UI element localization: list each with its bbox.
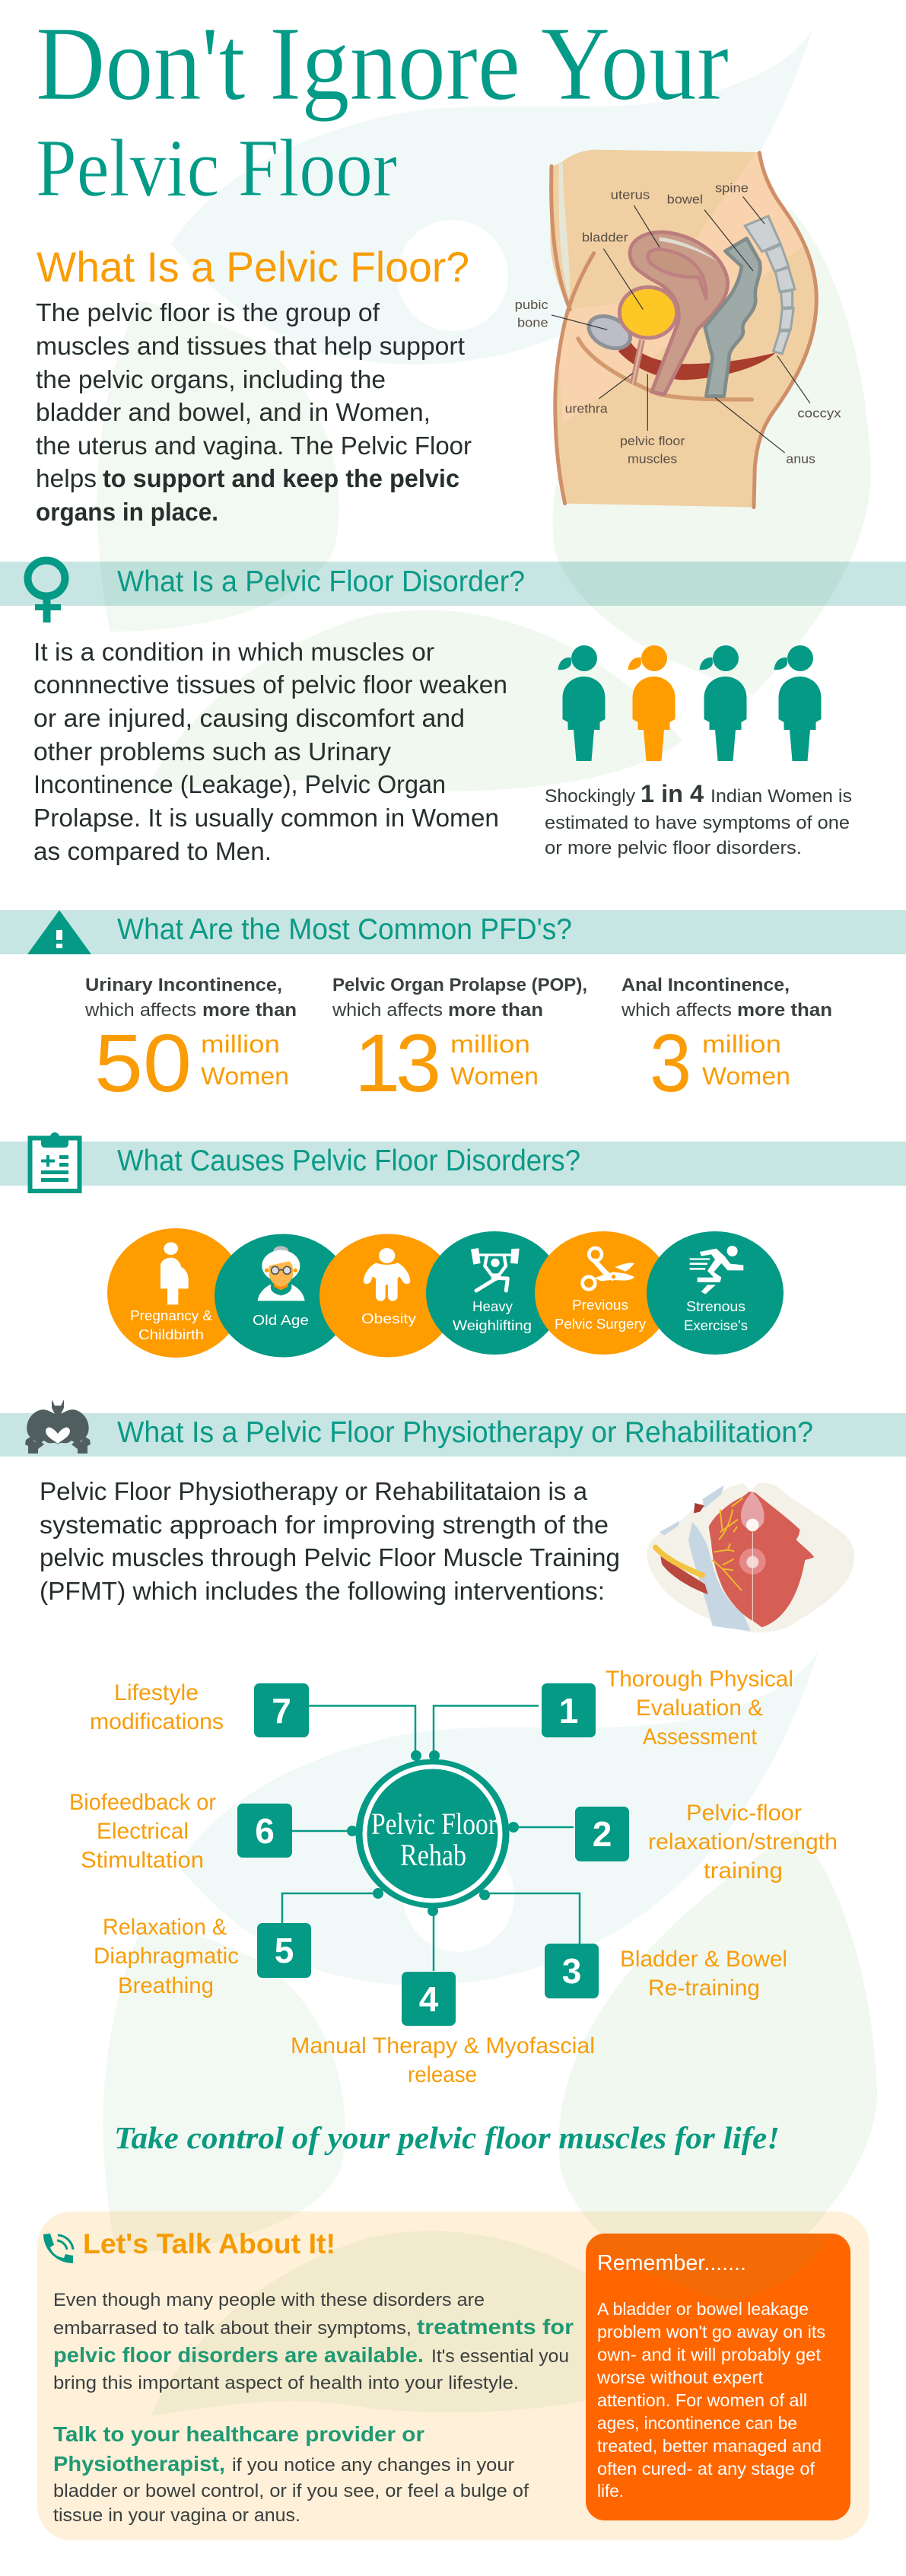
text block: to support and keep the pelvic [103,464,459,492]
stat: anal incontinence: million [702,1030,781,1058]
cause: previous pelvic surgery: Previous [572,1297,628,1313]
step 1: Evaluation & [636,1696,763,1721]
hub circle: Pelvic Floor [371,1807,497,1841]
background leaf motif: top [97,30,871,795]
text block: systematic approach for improving strength of the [40,1511,609,1539]
callout: remember: worse without expert [596,2367,764,2387]
text block [33,638,507,865]
callout: remember: Remember....... [597,2251,746,2275]
icon: weightlifter [471,1248,520,1291]
panel: what is a pelvic floor disorder [0,560,906,865]
callout: 1 in 4: Shockingly [545,786,635,807]
text block [40,1477,620,1605]
stat: anal incontinence [621,975,832,1109]
heading: What Is a Pelvic Floor Disorder? [117,565,525,598]
cause: heavy weightlifting: Weighlifting [453,1317,532,1333]
stat: anal incontinence: Women [702,1062,790,1090]
heading: What Is a Pelvic Floor Physiotherapy or Rehabilitation? [117,1416,813,1449]
panel: physiotherapy or rehabilitation [0,1399,906,1632]
cause: obesity: Obesity [361,1310,417,1326]
callout: 1 in 4: 1 in 4 [641,780,704,807]
title: Don't Ignore Your [36,5,729,123]
pelvic anatomy illustration: bowel [667,193,703,207]
step 3: Bladder & Bowel [620,1947,787,1972]
stat: urinary incontinence: which affects [84,1000,196,1021]
step 7: 7 [272,1691,291,1731]
text block: the uterus and vagina. The Pelvic Floor [36,431,472,460]
step 1 [542,1667,793,1750]
pelvic anatomy illustration: pubic [515,298,548,312]
text block: Pelvic Floor Physiotherapy or Rehabilitataion is a [40,1477,588,1505]
connector lines [282,1706,580,1971]
callout: 1 in 4: Indian Women is [710,786,852,807]
step 3 [545,1944,787,2001]
text block: talk to your provider: tissue in your vagina or anus. [53,2505,300,2526]
icon: pelvis [25,1399,91,1454]
panel: most common PFDs [0,910,906,1109]
step 3: Re-training [648,1976,760,2001]
pelvic floor model image [647,1482,854,1632]
cause: heavy weightlifting: Heavy [472,1298,513,1314]
callout: 1 in 4 [545,780,852,858]
step 4: 4 [419,1979,439,2019]
icon: female symbol [27,560,65,623]
heading: What Are the Most Common PFD's? [117,913,572,946]
step 1: Thorough Physical [606,1667,793,1692]
text block: talk to your provider: if you notice any changes in your [232,2455,514,2476]
stat: pelvic organ prolapse: Women [450,1062,539,1090]
text block: talk to your provider: Talk to your healthcare provider or [53,2422,424,2446]
stat: pelvic organ prolapse [332,975,587,1109]
panel: let's talk about it [37,2211,869,2540]
icon: pregnant woman [161,1242,189,1304]
step 5: Breathing [118,1973,214,1998]
icon: clipboard [30,1132,79,1191]
stat: anal incontinence: which affects [621,1000,732,1021]
icon: obese figure [364,1248,410,1301]
cause: old age [215,1234,351,1358]
step 7 [90,1680,309,1737]
panel: what is a pelvic floor [36,243,472,526]
text block: pelvic muscles through Pelvic Floor Muscle Training [40,1543,620,1571]
text block: other problems such as Urinary [33,737,392,766]
text block: talk to your provider: Physiotherapist, [53,2452,225,2476]
step 5: Relaxation & [103,1915,227,1940]
step 5 [94,1915,311,1998]
pelvic anatomy illustration: anus [786,451,815,466]
callout: remember: own- and it will probably get [597,2345,822,2364]
pelvic anatomy illustration: spine [715,181,749,196]
step 6: Stimultation [81,1848,204,1873]
cause: old age: Old Age [253,1312,309,1328]
pelvic anatomy illustration: coccyx [797,406,841,420]
text block: Prolapse. It is usually common in Women [33,804,499,832]
hub circle [356,1759,510,1909]
heading: What Causes Pelvic Floor Disorders? [117,1145,580,1177]
cause: pregnancy and childbirth: Pregnancy & [130,1307,213,1323]
callout: remember: life. [597,2481,624,2501]
icon: woman 2 highlighted [628,645,676,761]
text block: Incontinence (Leakage), Pelvic Organ [33,770,446,798]
callout: remember: A bladder or bowel leakage [597,2299,809,2319]
icon: phone [43,2234,73,2263]
pelvic anatomy illustration: muscles [628,451,677,466]
step 1: 1 [559,1691,578,1731]
cause: strenuous exercise: Exercise's [684,1317,748,1333]
text block: The pelvic floor is the group of [36,298,380,326]
text block: (PFMT) which includes the following interventions: [40,1577,605,1605]
header band [0,562,906,606]
cause: strenuous exercise: Strenous [686,1298,745,1314]
step 2 [575,1801,838,1883]
callout: remember: often cured- at any stage of [597,2459,815,2479]
step 4: release [408,2062,477,2087]
step 2: Pelvic-floor [686,1801,802,1826]
callout: remember: treated, better managed and [597,2436,822,2456]
header band [0,1413,906,1457]
text block: talk to your provider: bladder or bowel control, or if you see, or feel a bulge of [53,2481,529,2501]
step 2: relaxation/strength [648,1829,838,1855]
step 6: 6 [255,1811,275,1851]
step 6 [69,1790,292,1873]
title [36,5,729,214]
cause: pregnancy and childbirth: Childbirth [138,1326,204,1342]
cause: previous pelvic surgery [535,1231,672,1355]
text block: treatments: It's essential you [431,2346,569,2367]
stat: pelvic organ prolapse: 13 [354,1017,441,1109]
pelvic anatomy illustration: uterus [611,188,650,202]
cause: strenuous exercise [647,1231,784,1355]
header band [0,910,906,954]
text block: treatments [53,2290,574,2393]
stat: pelvic organ prolapse: which affects [332,1000,443,1021]
icon: runner [690,1246,743,1294]
hub circle: Rehab [400,1838,466,1872]
text block: treatments: Even though many people with these disorders are [53,2290,485,2310]
icon: warning triangle [27,910,91,954]
icon: elderly woman [258,1246,305,1301]
callout: remember: ages, incontinence can be [597,2413,797,2433]
cause: previous pelvic surgery: Pelvic Surgery [555,1316,647,1332]
step 2: training [704,1858,783,1883]
cause: obesity [319,1234,456,1358]
callout: remember [586,2234,850,2520]
text block: connnective tissues of pelvic floor weaken [33,670,507,699]
step 3: 3 [562,1951,581,1991]
text block: muscles and tissues that help support [36,332,465,360]
pelvic anatomy illustration [515,150,841,508]
callout: remember: attention. For women of all [597,2390,807,2410]
text block: helps [36,464,97,492]
pelvic anatomy illustration: pelvic floor [620,434,685,448]
text block: the pelvic organs, including the [36,365,386,393]
stat: anal incontinence: Anal Incontinence, [621,975,790,995]
text block: talk to your provider [53,2422,529,2526]
stat: urinary incontinence: million [201,1030,280,1058]
step 7: Lifestyle [114,1680,199,1705]
header band [0,1142,906,1186]
text block: bladder and bowel, and in Women, [36,398,431,426]
text block: treatments: bring this important aspect of health into your lifestyle. [53,2373,519,2393]
stat: anal incontinence: 3 [650,1017,691,1109]
cause: heavy weightlifting [426,1231,563,1355]
connector dots [347,1750,519,1916]
text block: organs in place. [36,498,218,526]
step 4 [291,1972,595,2087]
text block: treatments: pelvic floor disorders are available. [53,2343,424,2367]
stat: pelvic organ prolapse: Pelvic Organ Prolapse (POP), [332,975,587,995]
text block: treatments: treatments for [417,2315,574,2339]
step 5: 5 [275,1931,294,1970]
step 1: Assessment [643,1724,758,1750]
pelvic anatomy illustration: bladder [582,230,628,244]
step 5: Diaphragmatic [94,1944,239,1969]
text block: treatments: embarrased to talk about their symptoms, [53,2318,412,2339]
heading: Let's Talk About It! [83,2228,335,2259]
step 6: Electrical [97,1819,189,1844]
text block: It is a condition in which muscles or [33,638,434,666]
step 6: Biofeedback or [69,1790,216,1815]
stat: pelvic organ prolapse: more than [448,1000,543,1021]
icon: woman 4 [774,645,822,761]
background leaf motif: bottom [103,1651,877,2416]
step 2: 2 [593,1814,612,1854]
text block [36,298,472,526]
stat: pelvic organ prolapse: million [450,1030,530,1058]
stat: urinary incontinence: more than [202,1000,297,1021]
panel: causes [0,1132,906,1358]
icon: woman 3 [700,645,747,761]
stat: anal incontinence: more than [737,1000,832,1021]
stat: urinary incontinence: 50 [94,1017,192,1109]
callout: remember: problem won't go away on its [597,2322,825,2342]
icon: scissors [583,1248,634,1289]
callout: 1 in 4: estimated to have symptoms of one [545,813,850,833]
heading: What Is a Pelvic Floor? [37,243,469,291]
text block: as compared to Men. [33,837,272,865]
diagram: pelvic floor rehab hub [69,1667,838,2087]
icon: woman 1 [558,645,606,761]
stat: urinary incontinence [84,975,297,1109]
pelvic anatomy illustration: bone [517,315,548,330]
step 4: Manual Therapy & Myofascial [291,2033,595,2059]
pelvic anatomy illustration: urethra [565,402,608,416]
callout: 1 in 4: or more pelvic floor disorders. [545,838,802,858]
cause: pregnancy and childbirth [107,1228,244,1358]
step 7: modifications [90,1709,224,1734]
text block: or are injured, causing discomfort and [33,704,465,732]
title: Pelvic Floor [36,123,397,214]
stat: urinary incontinence: Women [201,1062,289,1090]
tagline: Take control of your pelvic floor muscles for life! [114,2120,780,2155]
stat: urinary incontinence: Urinary Incontinence, [85,975,282,995]
